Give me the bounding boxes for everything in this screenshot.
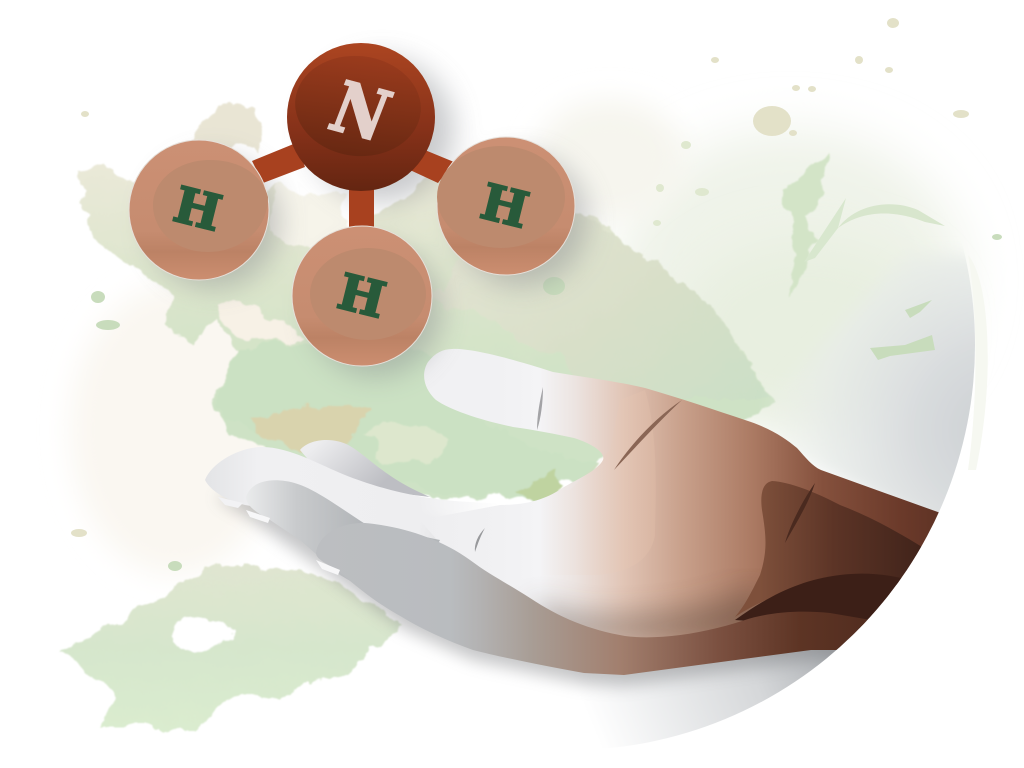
hand drop shadow	[215, 490, 860, 686]
back of hand and index finger	[420, 349, 960, 640]
thenar dark wedge	[736, 481, 922, 616]
beige paint droplets	[71, 18, 969, 537]
hand	[205, 349, 960, 675]
nitrogen atom	[287, 43, 435, 191]
circular backdrop crescent behind the hand	[500, 255, 1000, 760]
rear fingertip	[300, 440, 430, 497]
molecule soft shadow	[148, 58, 588, 376]
palm creases	[614, 400, 682, 470]
hydrogen atom right	[437, 137, 575, 275]
light palm panel	[599, 458, 603, 464]
hydrogen atom left	[129, 140, 269, 280]
hydrogen atom bottom: H	[332, 262, 391, 330]
ammonia molecule	[129, 43, 575, 366]
fingernails	[246, 510, 270, 523]
soft green rim right of the disc	[968, 255, 988, 470]
shadow in the palm hollow	[530, 585, 770, 640]
darkest palm crescent	[735, 574, 910, 630]
bonds	[252, 143, 454, 232]
hydrogen atom bottom	[292, 226, 432, 366]
hydrogen atom left: H	[168, 175, 227, 243]
grey ring finger	[250, 480, 440, 580]
watercolor splash background	[62, 100, 965, 727]
nitrogen atom: N	[319, 67, 401, 158]
green flecks over the crescent	[91, 141, 1002, 571]
hydrogen atom right: H	[475, 172, 534, 240]
lower palm	[316, 523, 868, 675]
front white finger	[205, 447, 460, 540]
